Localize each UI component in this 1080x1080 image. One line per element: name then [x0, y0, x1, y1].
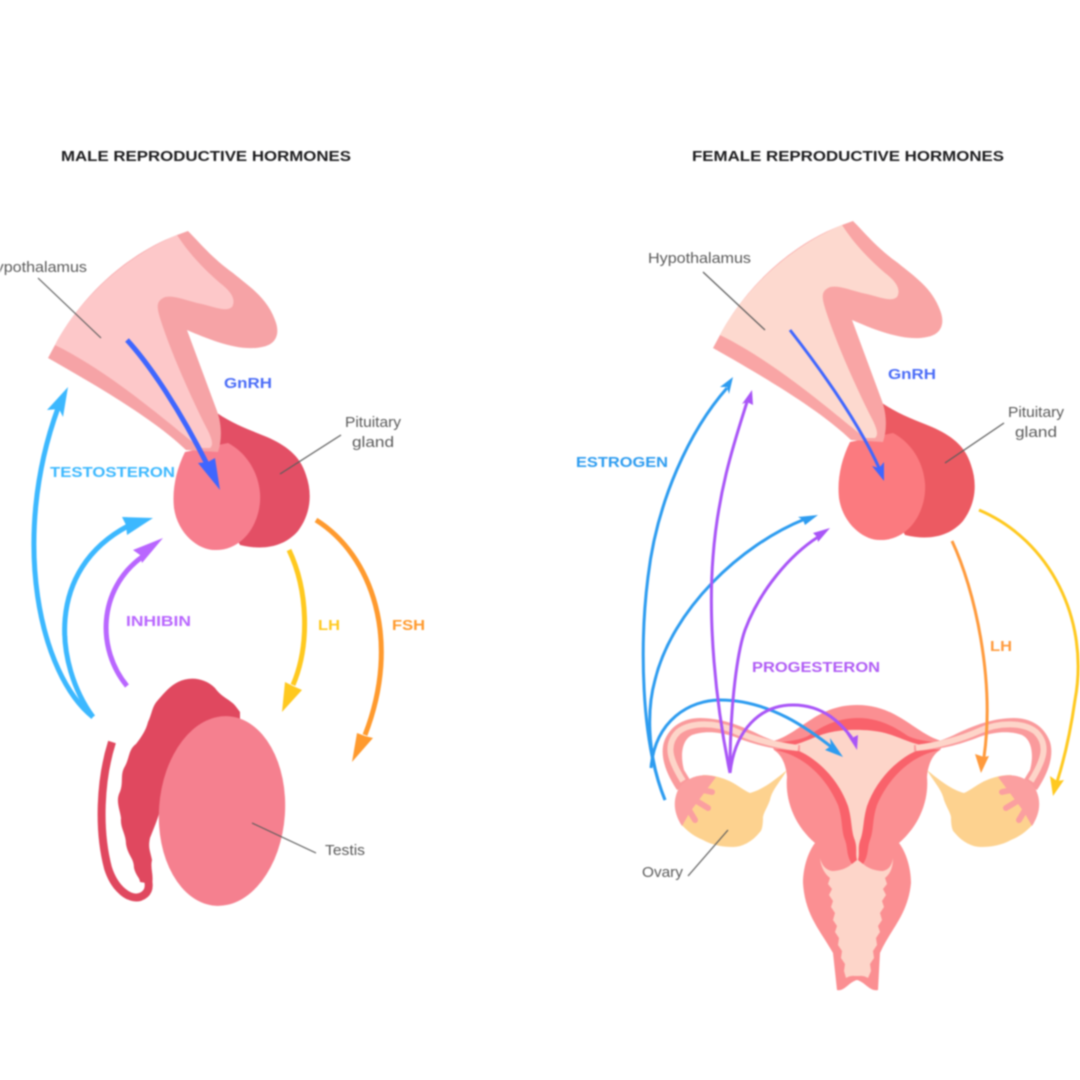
icon: female pituitary gland: [838, 403, 975, 540]
top lining: [775, 718, 940, 746]
arrow: progesteron to pituitary: [730, 528, 830, 773]
callout: pituitary gland female: [945, 404, 1065, 463]
label: testosteron: TESTOSTERON: [50, 465, 175, 481]
panel: male diagram: [0, 231, 425, 910]
icon: male testis: [153, 712, 291, 910]
arrow: LH female: [952, 541, 989, 773]
label: inhibin: INHIBIN: [126, 614, 191, 630]
arrow: FSH female: [979, 510, 1078, 796]
callout: pituitary gland: gland: [352, 434, 394, 451]
arrow: progesteron to uterus: [730, 705, 858, 773]
icon: uterus: [770, 705, 945, 990]
icon: right fallopian tube and ovary: [914, 718, 1051, 847]
icon: female hypothalamus: [713, 221, 942, 442]
icon: left fallopian tube and ovary: [663, 718, 800, 847]
arrow: estrogen to uterus: [651, 700, 843, 768]
panel: female diagram: [576, 221, 1078, 990]
label: progesteron: PROGESTERON: [752, 660, 880, 676]
arrow: GnRH: [127, 340, 220, 490]
callout: pituitary gland: [280, 414, 402, 474]
vaginal canal: [820, 838, 893, 978]
left lining: [775, 748, 857, 864]
icon: male hypothalamus: [48, 231, 277, 452]
callout: testis: [252, 823, 365, 859]
arrow: inhibin: [106, 538, 163, 686]
callout: hypothalamus: [0, 259, 101, 338]
arrow: LH male: [282, 550, 305, 712]
arrow: testosterone outer: [34, 387, 93, 717]
callout: pituitary gland: Pituitary: [345, 414, 402, 431]
arrow: GnRH female: [790, 330, 884, 481]
arrow: testosterone inner: [65, 517, 153, 717]
callout: hypothalamus female: Hypothalamus: [648, 250, 751, 267]
right lining: [858, 748, 940, 864]
icon: epididymis and vas deferens: [102, 679, 240, 898]
icon: male pituitary gland: [173, 413, 310, 550]
arrow: progesteron to hypothalamus: [711, 390, 753, 773]
label: estrogen: ESTROGEN: [576, 455, 668, 471]
callout: testis: Testis: [325, 842, 365, 859]
label: FSH: FSH: [392, 618, 425, 634]
uterine cavity: [785, 730, 930, 848]
arrow: FSH: [316, 520, 381, 762]
callout: pituitary gland female: Pituitary: [1008, 404, 1065, 421]
callout: ovary: Ovary: [642, 864, 684, 881]
callout: pituitary gland female: gland: [1015, 424, 1057, 441]
label: GnRH: GnRH: [224, 376, 272, 392]
arrow: estrogen to hypothalamus: [643, 377, 733, 800]
title: female reproductive hormones: FEMALE REPRODUCTIVE HORMONES: [692, 149, 1004, 165]
label: LH female: LH: [990, 639, 1012, 655]
label: GnRH female: GnRH: [888, 367, 936, 383]
arrow: estrogen to pituitary: [650, 515, 818, 800]
title: male reproductive hormones: MALE REPRODUCTIVE HORMONES: [61, 149, 351, 165]
label: LH: LH: [318, 618, 340, 634]
callout: ovary: [642, 830, 728, 881]
callout: hypothalamus female: [648, 250, 765, 330]
